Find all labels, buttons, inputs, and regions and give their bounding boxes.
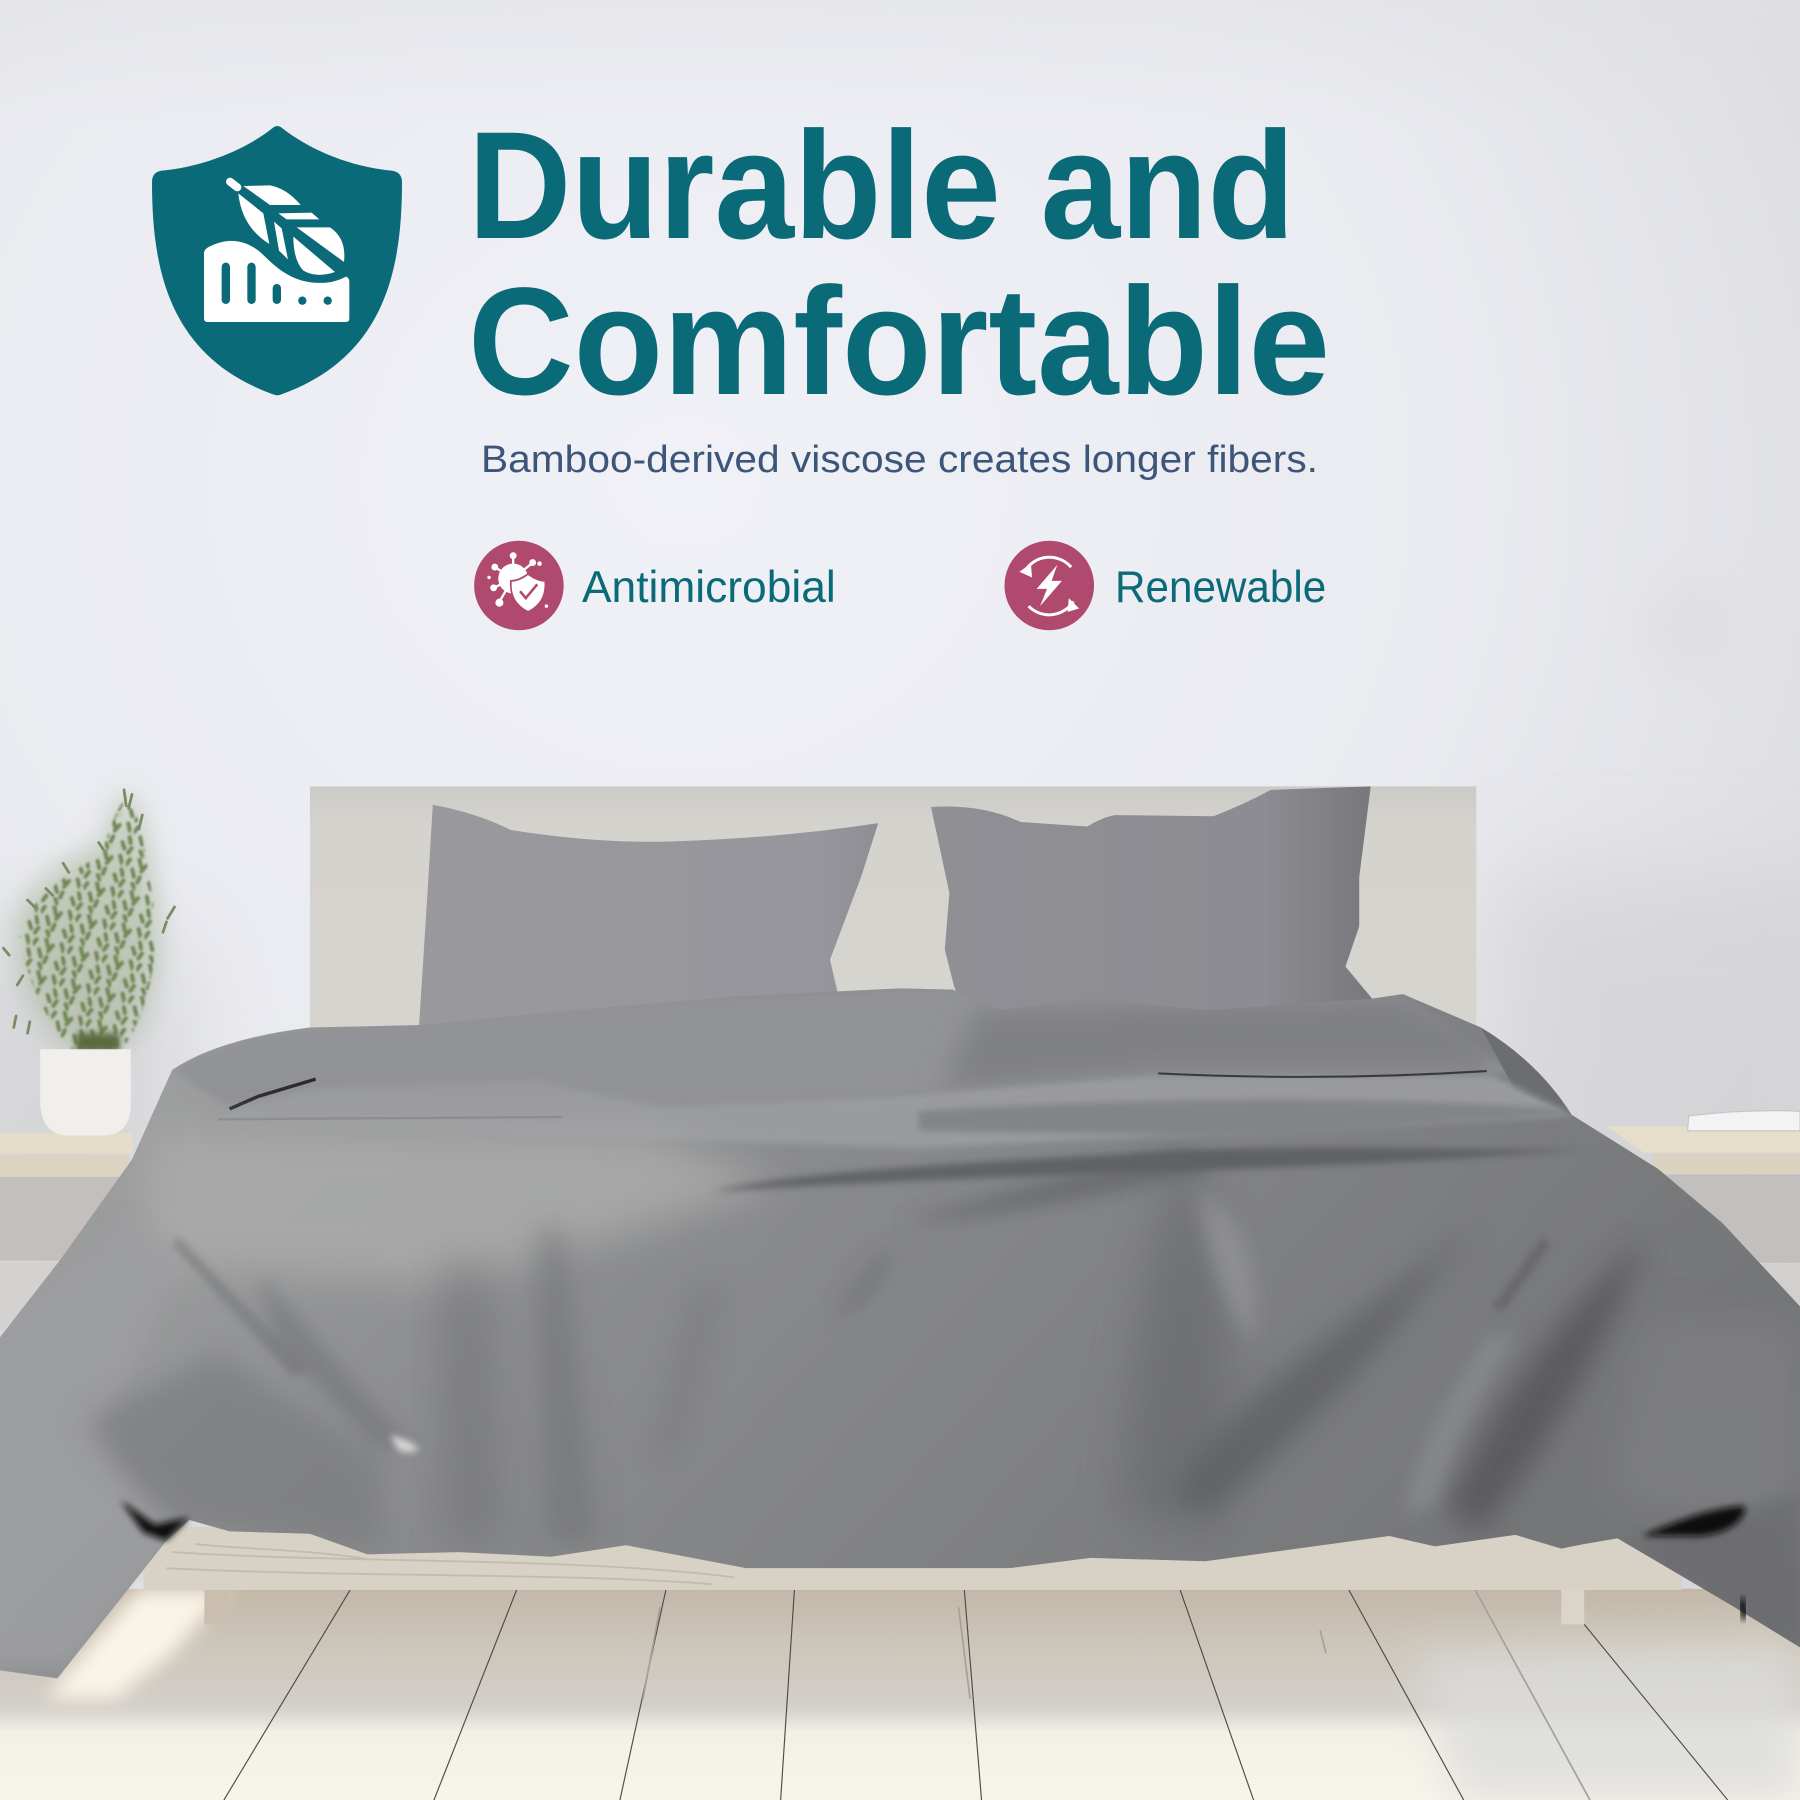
feather	[230, 182, 344, 275]
plant pot	[40, 1049, 131, 1135]
feature: renewable	[1004, 541, 1326, 630]
duvet hem shadows	[121, 1500, 189, 1541]
right nightstand	[1606, 1111, 1800, 1310]
left nightstand	[0, 1133, 132, 1329]
left pillow	[413, 805, 976, 1056]
shield icon	[152, 126, 402, 395]
headboard	[310, 786, 1476, 1062]
plant	[3, 790, 174, 1052]
right pillow	[931, 786, 1374, 1033]
sheet strip	[420, 1074, 1568, 1149]
title: Comfortable	[468, 256, 1330, 427]
label: Renewable: Renewable	[1115, 562, 1326, 612]
mattress	[204, 241, 349, 322]
icon: virus and shield	[474, 541, 564, 630]
bed frame	[144, 1527, 1682, 1624]
duvet dark folds	[86, 1353, 385, 1550]
duvet	[0, 988, 1800, 1678]
subtitle: Bamboo-derived viscose creates longer fibers.	[481, 439, 1318, 481]
label: Antimicrobial: Antimicrobial	[582, 562, 836, 612]
feature: antimicrobial	[474, 541, 836, 630]
duvet top folded band	[172, 988, 1515, 1109]
duvet light areas	[138, 1131, 781, 1286]
book	[1688, 1111, 1800, 1131]
wall shading	[0, 0, 1800, 1355]
title	[468, 100, 1330, 427]
icon: circular arrows and lightning bolt	[1004, 541, 1094, 630]
duvet right flap shadow	[1642, 1506, 1745, 1536]
title: Durable and	[468, 100, 1295, 271]
floor	[0, 1589, 1800, 1800]
duvet highlight	[390, 1435, 419, 1453]
